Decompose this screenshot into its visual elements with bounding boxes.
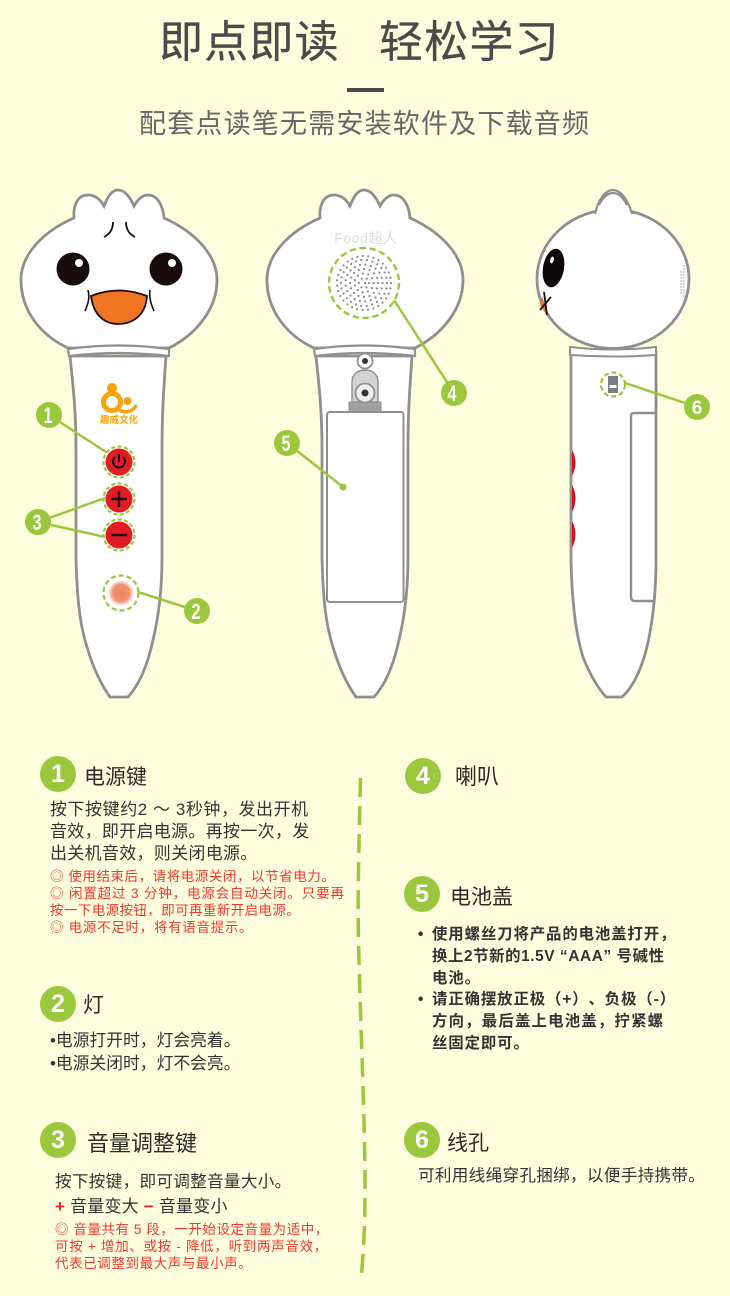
brand logo (100, 383, 138, 426)
battery cover (327, 412, 404, 602)
heading: light: 灯 (83, 994, 104, 1017)
badge 4 (405, 758, 441, 794)
pen collar (570, 347, 656, 356)
pen body (316, 356, 412, 697)
badge 2 (40, 986, 76, 1022)
side eye (540, 247, 567, 289)
callout 6: 6 (692, 398, 702, 419)
callout 4: 4 (448, 381, 457, 406)
cord hole (601, 372, 625, 396)
battery bullet marks: • (418, 991, 424, 1008)
callout 2: 2 (192, 599, 200, 624)
callout 1 (36, 402, 106, 452)
power key notes: 按一下电源按钮，即可再重新开启电源。 (50, 903, 300, 918)
light description: •电源关闭时，灯不会亮。 (50, 1054, 240, 1073)
power key description: 出关机音效，则关闭电源。 (50, 844, 258, 863)
head nub outline (595, 190, 632, 214)
battery latch (349, 370, 381, 412)
brand logo: 趣威文化 (100, 414, 138, 426)
screw (358, 354, 372, 368)
power key notes: ◎ 电源不足时，将有语音提示。 (50, 920, 253, 935)
volume description: 按下按键，即可调整音量大小。 (55, 1172, 292, 1191)
power button (104, 446, 134, 478)
battery instructions: 丝固定即可。 (432, 1035, 530, 1052)
volume notes: ◎ 音量共有 5 段，一开始设定音量为适中， (55, 1222, 329, 1237)
light description (50, 1031, 240, 1073)
speaker highlight ring (329, 248, 399, 318)
badge 4: 4 (416, 762, 430, 790)
indicator light (104, 576, 138, 610)
power key notes: ◎ 使用结束后，请将电源关闭，以节省电力。 (50, 869, 335, 884)
callout 4 (394, 300, 467, 406)
pen body (571, 352, 656, 697)
battery instructions: 方向，最后盖上电池盖，拧紧螺 (432, 1013, 664, 1030)
cord bump (653, 382, 658, 407)
battery cover side (631, 413, 655, 601)
callout 5 (274, 430, 346, 490)
subtitle: 配套点读笔无需安装软件及下载音频 (139, 109, 590, 139)
title: 即点即读 (159, 18, 340, 67)
callout 2 (138, 592, 210, 624)
light description: •电源打开时，灯会亮着。 (50, 1031, 240, 1050)
power key description: 按下按键约2 ～ 3秒钟，发出开机 (50, 800, 309, 819)
title divider bar (347, 88, 384, 92)
badge 6: 6 (415, 1126, 429, 1154)
volume notes: 代表已调整到最大声与最小声。 (55, 1256, 252, 1271)
plus button (104, 484, 134, 514)
callout 6 (625, 383, 710, 420)
pen: back view (267, 190, 467, 697)
callout 5: 5 (282, 431, 290, 456)
heading: battery cover: 电池盖 (450, 886, 513, 909)
badge 5 (404, 876, 440, 912)
heading: speaker: 喇叭 (455, 764, 499, 789)
minus button (104, 520, 134, 550)
cord hole description: 可利用线绳穿孔捆绑，以便手持携带。 (418, 1166, 705, 1185)
heading: power key: 电源键 (84, 766, 147, 789)
badge 6 (404, 1122, 440, 1158)
volume notes (55, 1222, 329, 1271)
side mouth (540, 292, 551, 315)
power key notes (50, 869, 345, 935)
volume legend: + 音量变大 − 音量变小 (55, 1197, 228, 1216)
power key notes: ◎ 闲置超过 3 分钟，电源会自动关闭。只要再 (50, 886, 345, 901)
callout 3 (25, 498, 105, 537)
heading: volume keys: 音量调整键 (87, 1131, 197, 1156)
volume notes: 可按 + 增加、或按 - 降低，听到两声音效， (55, 1239, 328, 1254)
face: brows (104, 222, 135, 237)
dashed column divider (358, 778, 365, 1278)
brand text: Food超人 (334, 230, 398, 246)
power key description (50, 800, 310, 863)
power key description: 音效，即开启电源。再按一次，发 (50, 822, 310, 841)
pen collar (314, 346, 415, 356)
badge 3 (40, 1122, 76, 1158)
pen head (537, 210, 689, 348)
head nub (595, 190, 632, 218)
battery instructions: 使用螺丝刀将产品的电池盖打开， (432, 926, 676, 943)
title second part: 轻松学习 (379, 18, 560, 67)
side speaker dots (681, 266, 684, 298)
battery instructions: 电池。 (432, 970, 481, 987)
badge 1 (40, 756, 76, 792)
pen collar (68, 346, 169, 356)
heading: cord hole: 线孔 (447, 1132, 489, 1155)
battery instructions: 换上2节新的1.5V “AAA” 号碱性 (432, 948, 665, 965)
badge 2: 2 (51, 990, 65, 1018)
speaker grille (337, 256, 391, 310)
pen body (70, 356, 166, 697)
badge 1: 1 (51, 760, 65, 788)
face: eyes (56, 252, 182, 286)
badge 3: 3 (51, 1126, 65, 1154)
callout 3: 3 (32, 510, 42, 535)
pen head (21, 190, 217, 348)
battery instructions (432, 926, 676, 1052)
face: mouth (85, 290, 154, 324)
battery bullet marks: • (418, 926, 424, 943)
battery bullet marks (418, 926, 424, 1008)
callout 1: 1 (44, 403, 52, 428)
pen: front view (21, 190, 217, 697)
battery instructions: 请正确摆放正极（+）、负极（-） (432, 991, 676, 1008)
badge 5: 5 (415, 880, 429, 908)
pen: side view (537, 190, 710, 697)
red button edges (572, 450, 576, 548)
pen head (267, 190, 463, 348)
